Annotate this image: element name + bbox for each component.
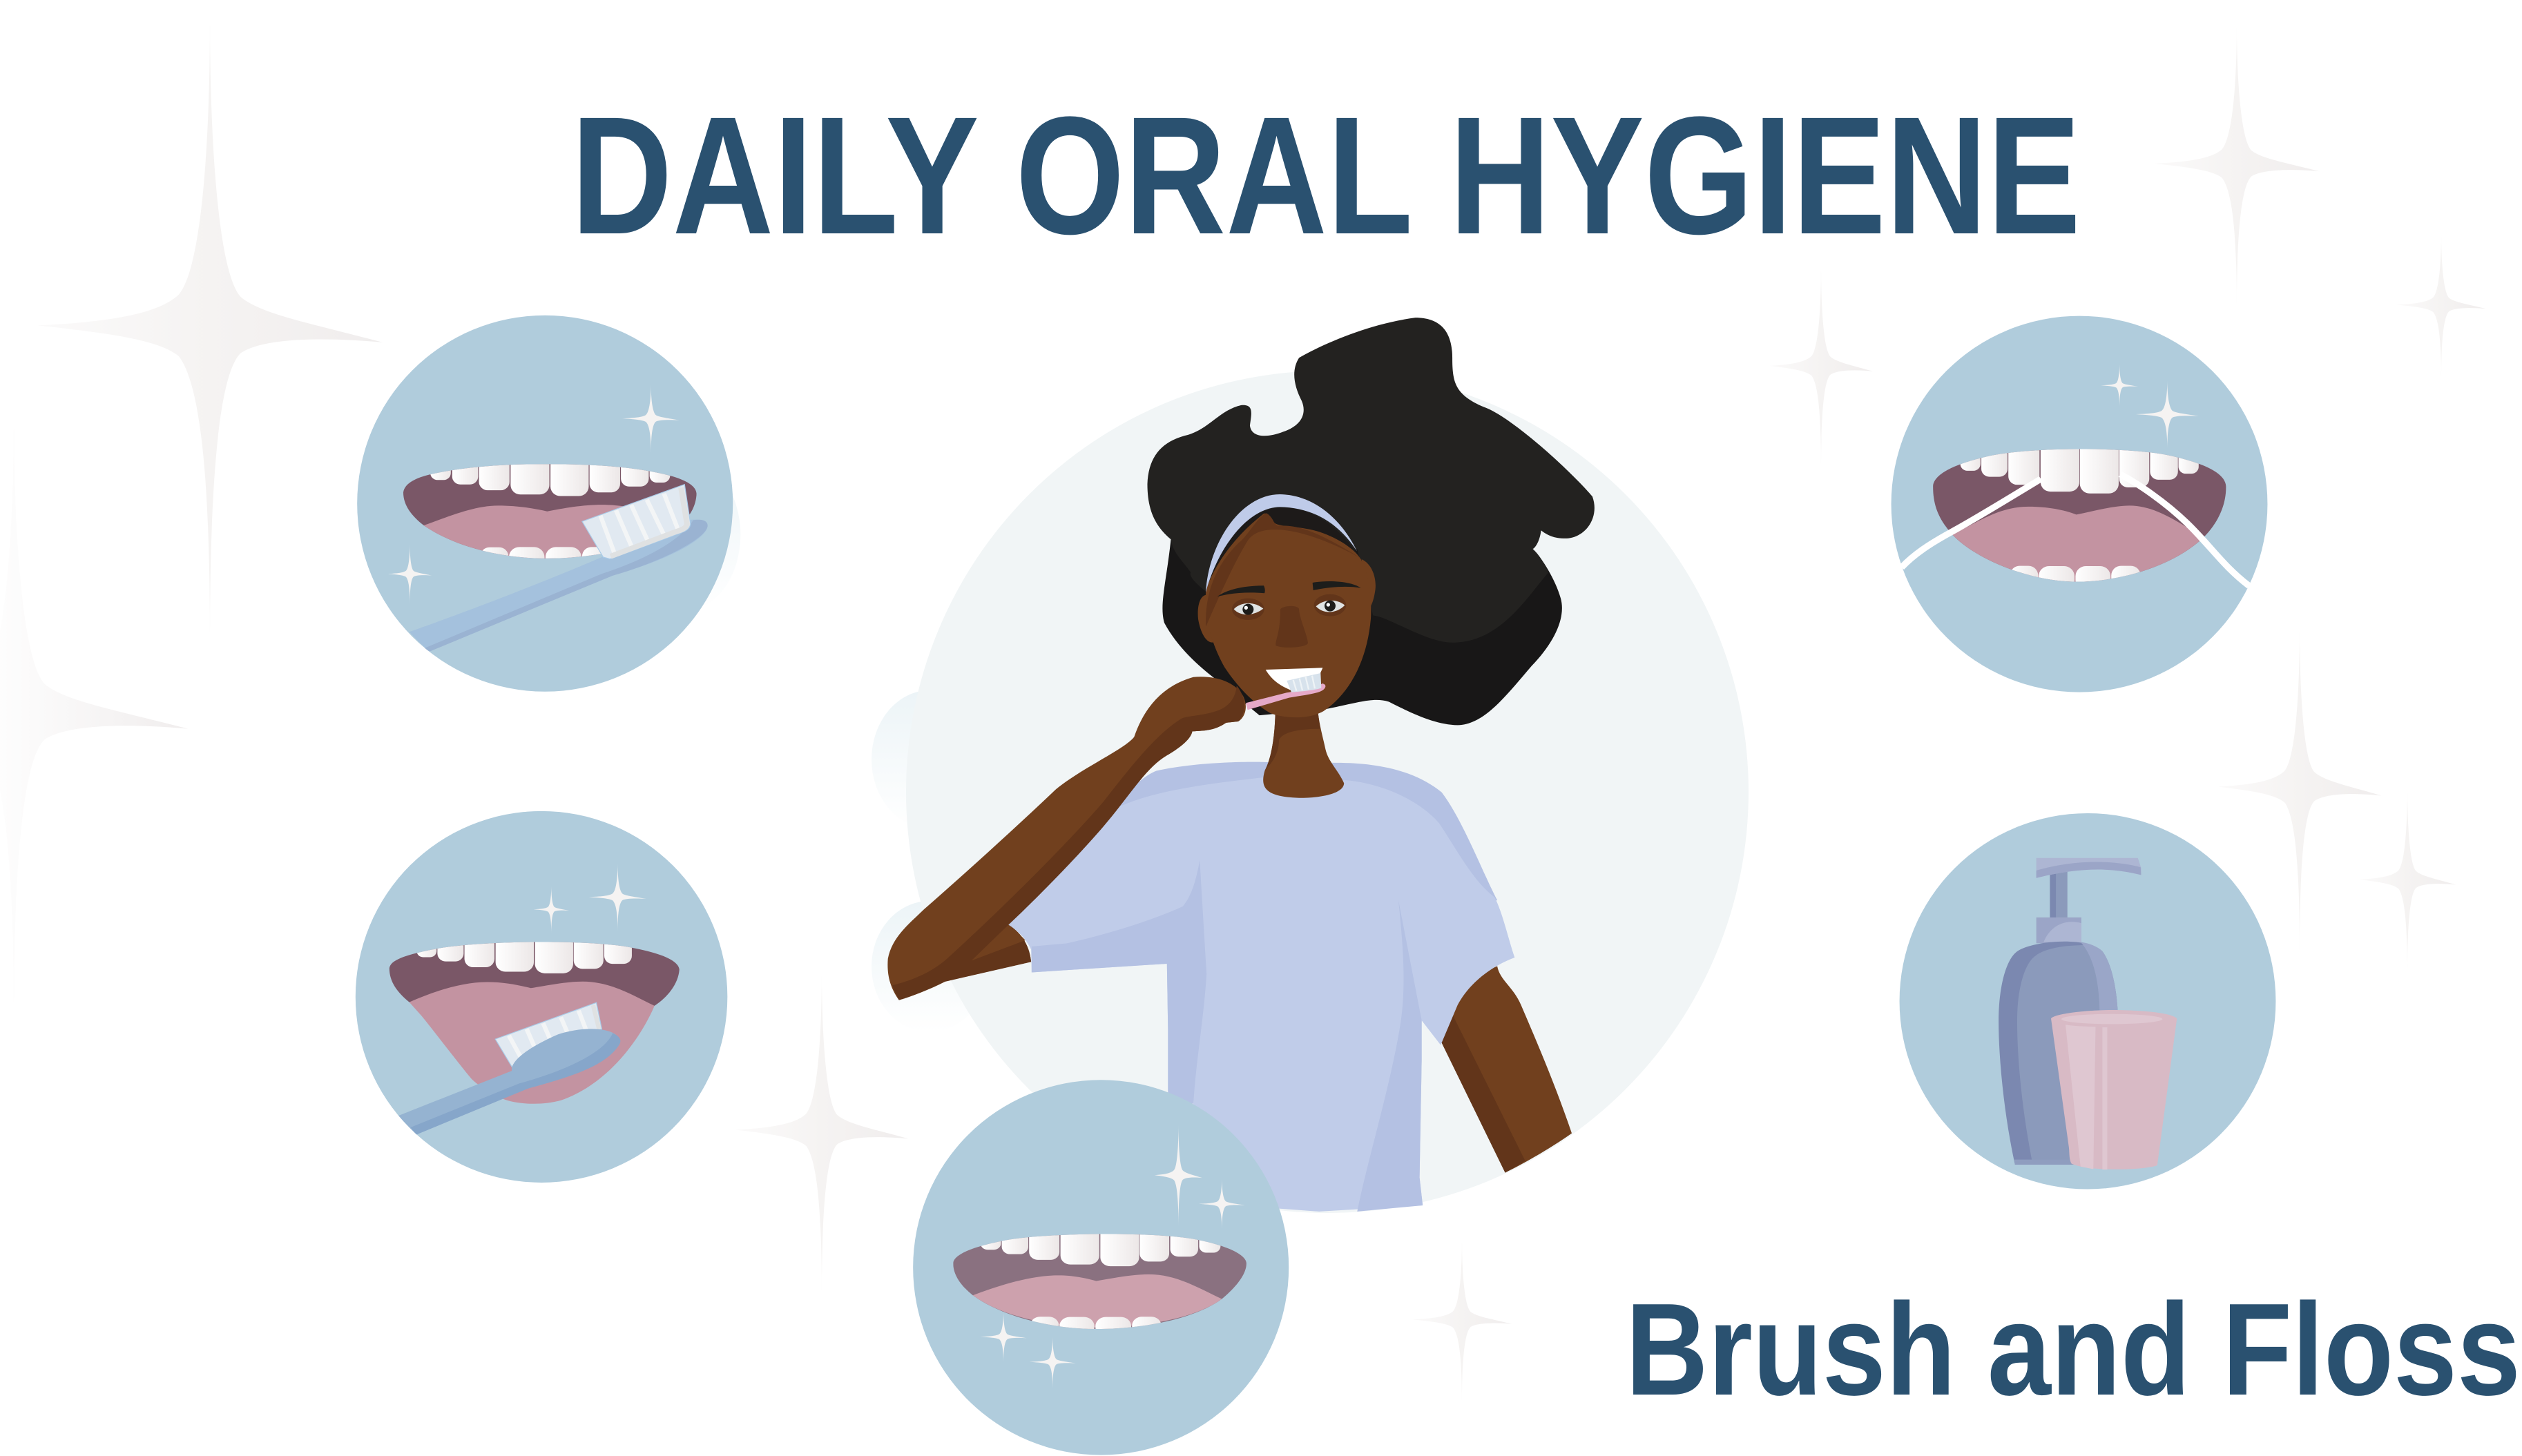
open mouth with teeth [389,926,680,1104]
circle background [357,316,740,692]
sparkles [980,1124,1245,1388]
right arm [1441,967,1572,1173]
rinse cup [2051,1010,2177,1169]
sparkles [534,864,646,934]
panel: brushing the tongue [356,811,727,1183]
hair [1147,318,1595,725]
circle background [1892,316,2267,692]
circle background [1900,813,2275,1190]
panel: brushing upper teeth [357,316,740,692]
dental floss [1902,474,2249,586]
toothbrush [410,485,708,652]
eyebrows [1217,581,1361,596]
central illustration: woman brushing teeth [872,318,1749,1213]
tongue [410,982,655,1104]
nose [1276,606,1308,648]
raised arm and hand [887,677,1246,1000]
open mouth with teeth [403,464,697,559]
neck [1263,709,1344,798]
toothbrush [398,1002,620,1135]
circle background [356,811,727,1183]
sparkles [2101,364,2199,449]
small toothbrush [1246,673,1325,710]
title: DAILY ORAL HYGIENE [571,82,2081,269]
headband [1206,494,1357,592]
t-shirt [1008,762,1514,1212]
backdrop circle [872,371,1749,1213]
mouthwash bottle [1999,858,2141,1165]
open mouth with teeth [953,1234,1246,1329]
panel: mouthwash and cup [1900,813,2275,1190]
panel: flossing [1892,316,2267,692]
panel: clean smile [913,1080,1289,1455]
smile [1266,668,1322,690]
face [1198,494,1376,717]
sparkles [388,385,680,605]
circle background [913,1080,1289,1455]
open mouth with teeth [1933,449,2226,581]
eyes [1232,594,1346,620]
